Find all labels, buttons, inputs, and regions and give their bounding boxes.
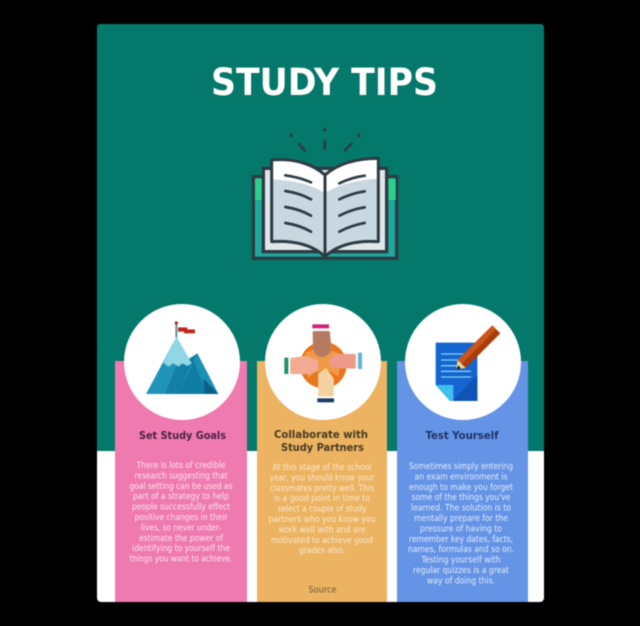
heading: collaborate with study partners: Collaborate with [274, 429, 368, 441]
title: STUDY TIPS [211, 61, 438, 104]
text: set study goals body: lives, so never under- [141, 522, 221, 532]
text: test yourself body: regular quizzes is a great [413, 565, 510, 575]
text: set study goals body: part of a strategy to help [133, 491, 229, 501]
text: set study goals body: research suggesting that [134, 470, 228, 480]
text: collaborate body: grades also. [299, 545, 345, 555]
text: set study goals body [130, 460, 232, 564]
text: set study goals body: There is lots of credible [136, 460, 226, 470]
text: test yourself body: way of doing this. [427, 575, 495, 585]
icon circle: document and pencil [405, 304, 521, 420]
text: test yourself body: some of the things you've [412, 492, 510, 502]
text: test yourself body: mentally prepare for the [414, 513, 508, 523]
text: collaborate body: At this stage of the school [272, 462, 372, 472]
text: test yourself body: names, formulas and so on. [408, 544, 514, 554]
text: collaborate body [268, 462, 376, 555]
text: test yourself body [408, 461, 514, 585]
text: collaborate body: partners who you know you [268, 514, 376, 524]
text: test yourself body: Testing yourself with [421, 555, 500, 565]
text: collaborate body: year, you should know your [270, 472, 375, 482]
source link: Source [308, 584, 336, 594]
icon: open book [253, 128, 397, 258]
poster background [97, 24, 544, 602]
heading: set study goals: Set Study Goals [139, 430, 226, 442]
text: test yourself body: enough to make you forget [409, 482, 514, 492]
text: set study goals body: things you want to achieve. [130, 554, 232, 564]
heading: collaborate with study partners [274, 429, 368, 454]
panel: set study goals [115, 304, 247, 602]
text: set study goals body: goal setting can be used as [130, 481, 232, 491]
icon circle: joined hands [265, 304, 381, 420]
panel: test yourself [397, 304, 528, 602]
text: test yourself body: learned. The solution is to [411, 503, 511, 513]
heading: test yourself: Test Yourself [426, 430, 499, 442]
text: set study goals body: people successfully effect [132, 502, 231, 512]
icon circle: mountain [124, 304, 240, 420]
text: set study goals body: estimate the power of [139, 533, 224, 543]
panel: collaborate with study partners [257, 304, 387, 602]
text: collaborate body: motivated to achieve good [271, 535, 373, 545]
text: test yourself body: pressure of having to [420, 523, 502, 533]
text: test yourself body: remember key dates, facts, [409, 534, 513, 544]
text: test yourself body: Sometimes simply entering [409, 461, 513, 471]
text: set study goals body: positive changes in their [134, 512, 228, 522]
text: set study goals body: identifying to yourself the [132, 543, 230, 553]
text: collaborate body: is a good point in time to [274, 493, 370, 503]
text: collaborate body: select a couple of study [278, 504, 367, 514]
text: collaborate body: classmates pretty well. This [270, 483, 374, 493]
text: test yourself body: an exam environment is [414, 471, 508, 481]
text: collaborate body: work well with and are [278, 524, 366, 534]
heading: collaborate with study partners: Study Partners [281, 442, 364, 454]
